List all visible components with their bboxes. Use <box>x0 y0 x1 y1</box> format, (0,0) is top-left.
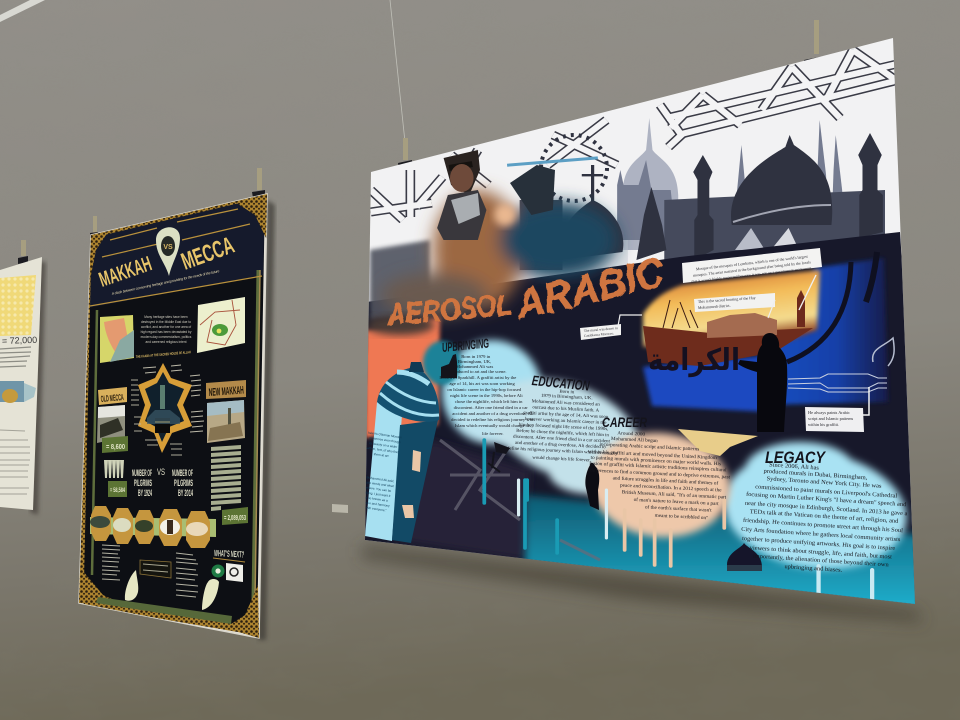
section: education: however working an Islamic career in the <box>525 417 607 426</box>
section: upbringing: chose the nightlife, which left him in <box>455 399 523 405</box>
section: career: meant to be scribbled on" <box>655 513 708 521</box>
section: legacy: City Arts foundation where he gathers local community artists <box>741 526 901 543</box>
section: upbringing: introduced to art and the scene. <box>449 369 507 374</box>
calligraphy: الكرامة <box>648 343 740 378</box>
subtitle: A clash between conserving heritage and providing for the needs of the future <box>110 269 220 296</box>
teal bottom wash <box>525 495 925 615</box>
dark brush strokes <box>787 252 877 362</box>
spray cloud: career <box>585 426 735 544</box>
section: career: CAREER <box>602 415 648 431</box>
panel: Makkah vs Mecca poster: PILGRIMS <box>174 478 193 488</box>
section: legacy <box>741 448 908 574</box>
section: career: peace and reconciliation. In a 2012 speech at the <box>620 483 722 493</box>
left bullet list <box>102 545 120 580</box>
panel: Makkah vs Mecca poster: NUMBER OF <box>172 468 193 478</box>
center quote box <box>140 560 171 578</box>
section: career: Mohammed Ali began <box>611 436 658 444</box>
section: upbringing: Islam which eventually would change his <box>455 423 531 428</box>
stat: pilgrims 2014 <box>222 507 248 525</box>
spray can captions: its beauty on a wider <box>369 441 397 449</box>
callout: script note <box>805 387 869 432</box>
section: legacy: friendship. He continues to promote street art through his Soul <box>743 517 903 534</box>
callout: sacred housing note: Mohammedi district. <box>698 304 731 310</box>
intro text lines <box>0 347 31 367</box>
section: legacy: TEDx talk at the Vatican on the theme of art, religion, and <box>749 508 899 525</box>
spray can captions: unifying. I just want it <box>362 490 391 498</box>
stat: pilgrims 1924: = 58,584 <box>110 487 125 494</box>
section: career: within his graffiti art and moved beyond the United Kingdom <box>588 448 717 461</box>
label: New Makkah <box>206 380 246 399</box>
islamic lattice pattern <box>371 50 931 220</box>
stat: 72,000: = 72,000 <box>2 335 37 346</box>
section: legacy: viewers to think about struggle, life, and faith, but most <box>749 545 892 561</box>
section: education: hip-hop focused night life scene of the 1990s, <box>519 423 609 432</box>
spray can captions: with everyone." <box>365 506 387 512</box>
paint drips <box>484 440 872 600</box>
section: career: and future struggles in life and faith and themes of <box>612 475 719 487</box>
section: upbringing: UPBRINGING <box>441 336 490 355</box>
section: legacy: LEGACY <box>765 448 827 467</box>
callout: mosque note <box>682 248 822 310</box>
spray cloud: education <box>496 373 643 500</box>
callout: mural location note: Casablanca Morocco. <box>584 331 614 338</box>
painting: kasbah <box>643 290 813 366</box>
callout: sacred housing note <box>694 293 775 318</box>
stat: old mecca area: = 8,600 <box>106 444 125 451</box>
silhouette figure <box>738 333 787 432</box>
intro text: Many heritage sites have been <box>144 315 188 319</box>
callout: mural location note: The mural was drawn in <box>584 326 618 333</box>
flourish ornament <box>873 338 894 366</box>
header band <box>87 196 265 308</box>
callout: mosque note: mosques. The artist narrated in the background after being told by the locals <box>693 260 811 278</box>
stat: old mecca area <box>102 436 128 453</box>
spray can captions: preserves even though <box>369 436 401 444</box>
icon: graduation cap <box>488 442 510 472</box>
section: upbringing: discontent. After one friend died in a car <box>454 405 528 410</box>
section: upbringing: Raised in Sparkhill. A graffiti artist by the <box>439 375 516 380</box>
section: career: of the earth's surface that wasn't <box>645 504 712 514</box>
central Kaaba star <box>138 363 192 453</box>
spray can <box>362 362 439 543</box>
section: upbringing: night life scene in the 1990s, before Ali <box>450 393 523 399</box>
section: legacy: upbringing and biases. <box>784 563 843 574</box>
comparison labels: BY 1924 <box>138 488 152 498</box>
spray can captions: them at art <box>374 452 389 458</box>
stat: pilgrims 1924 <box>108 481 127 497</box>
dark purple wash lower left <box>412 442 530 558</box>
hanging wires and clips <box>18 0 824 264</box>
section: education: graffiti artist by the age of 14, Ali was soon <box>523 411 609 420</box>
title: Aerosol Arabic: ARABIC <box>511 248 669 328</box>
label: Old Mecca <box>98 387 127 405</box>
section: education: redefine his religious journey with Islam which eventually <box>503 446 618 457</box>
intro text <box>141 315 192 344</box>
section: career: incorporating Arabic script and Islamic patterns <box>599 442 699 452</box>
section: upbringing: Born in 1979 in <box>461 354 491 359</box>
lower dark body <box>355 232 925 620</box>
section: upbringing: Birmingham, UK, <box>458 359 491 365</box>
intro text: and careened religious intent <box>146 340 187 344</box>
section: career: to painting murals with prominence on major world walls. His <box>590 455 721 467</box>
section: career: fusion of graffiti with Islamic artistic traditions reinspires cultural <box>589 460 727 473</box>
shadow of Aerosol Arabic poster <box>362 545 925 622</box>
callout: mural location note <box>580 315 642 340</box>
painting: harbour masts <box>663 300 698 328</box>
callout: mosque note: Mosque of the mosques of Lembarra, which is one of the world's largest <box>696 255 809 272</box>
section: upbringing: decided to redefine his religious journey with <box>451 417 535 422</box>
icon: Birmingham building <box>441 354 457 378</box>
stat: pilgrims 2014: = 2,089,053 <box>224 515 246 522</box>
section: education: would change his life forever. <box>532 456 591 463</box>
section: legacy: together to produce unifying artworks. His goal is to inspire <box>742 535 896 552</box>
icon: Starbucks logo <box>212 564 224 578</box>
icon: white logo box <box>226 563 243 582</box>
skyline: pale back layer <box>515 118 678 280</box>
spray can captions <box>366 432 402 512</box>
callout: script note: He always paints Arabic <box>808 410 850 415</box>
small wall label <box>332 504 348 513</box>
panel: Makkah vs Mecca poster <box>78 194 275 640</box>
section: legacy: produced murals in Dubai, Birmingham, <box>763 468 868 481</box>
callout: mosque note: that it wasn't highly respected because it was not on a government monument. <box>691 266 812 284</box>
section: legacy: Sydney, Toronto and New York City. He was <box>766 475 882 490</box>
hexagon timeline <box>90 506 216 548</box>
makkah area map <box>197 297 245 353</box>
panel: Makkah vs Mecca poster: NEW MAKKAH <box>208 385 244 399</box>
callout: sacred housing note: This is the sacred housing of the Hay <box>698 296 756 304</box>
gold borders <box>92 195 266 236</box>
intro text: high regard has been devastated by <box>141 330 192 334</box>
comparison labels: NUMBER OF <box>132 468 152 478</box>
icon: painter figure <box>585 463 599 510</box>
gold corner ornaments <box>90 234 106 275</box>
painting: sunset <box>643 270 820 347</box>
title: Makkah: MAKKAH <box>96 252 155 292</box>
green lower band <box>96 597 232 624</box>
section: career <box>588 415 731 521</box>
graffiti spray smudges behind title <box>381 190 617 317</box>
spray cloud: legacy <box>716 440 914 580</box>
header rules <box>90 209 262 306</box>
section: education: 1979 in Birmingham, UK. <box>541 394 593 401</box>
intro text: destroyed in the Middle East due to <box>141 320 191 324</box>
panel: Aerosol Arabic poster <box>355 38 931 620</box>
section: upbringing: life forever. <box>482 431 504 436</box>
section: career: of man's nature to leave a mark on a part <box>633 496 719 507</box>
geometric pattern lower left <box>440 440 600 560</box>
section: career: British Museum, Ali said, "It's of an ummatic part <box>622 489 727 501</box>
vs badge <box>156 227 180 276</box>
section: education: EDUCATION <box>531 373 591 395</box>
new makkah photo <box>207 400 245 443</box>
spray cloud: upbringing <box>442 340 542 444</box>
parchment tip <box>678 429 758 456</box>
comparison labels: VS <box>157 467 165 477</box>
intro text: modern-day commercialism, politics <box>141 335 192 339</box>
heading: Kaaba: THE KAABA AT THE SACRED HOUSE OF ALLAH <box>136 350 191 359</box>
shrine image <box>0 381 36 403</box>
right bullet list <box>176 553 198 597</box>
panel: Makkah vs Mecca poster: BY 2014 <box>178 488 193 498</box>
spray can captions: As Mohammed Ali said, <box>362 475 395 483</box>
panel: Makkah vs Mecca poster: OLD MECCA <box>100 392 124 404</box>
body text lines <box>0 430 30 494</box>
star side notes <box>131 365 204 455</box>
section: legacy: focusing on Martin Luther King's "I have a dream" speech and <box>746 491 907 508</box>
panel: far left poster <box>0 257 46 515</box>
title: Aerosol Arabic <box>385 248 669 332</box>
section: education: Before he chose the nightlife, which left him in <box>516 429 610 438</box>
section: education: outcast due to his Muslim faith. A <box>532 405 600 414</box>
section: education: and another of a drug overdose, Ali decided to <box>515 441 607 450</box>
spray can captions: saffron, text, of who find <box>366 446 399 454</box>
skyline: mid layer <box>617 120 842 240</box>
section: legacy: Since 2006, Ali has <box>769 462 820 472</box>
section: education: Mohammed Ali was considered an <box>532 399 601 408</box>
callout: script note: script and Islamic patterns <box>808 416 854 421</box>
spray can captions: Islam's Ottoman Mosque <box>368 431 403 439</box>
section: legacy: commissioned to paint murals on Liverpool's Cathedral <box>755 484 898 500</box>
spray can captions: I believe. You can be <box>363 485 392 493</box>
section: upbringing: accident and another of a drug overdose, Ali <box>452 411 534 417</box>
section: upbringing: Mohammed Ali was <box>456 364 494 369</box>
spray can captions: "I take words and what <box>362 480 394 488</box>
title: Aerosol Arabic: AEROSOL <box>385 288 513 332</box>
icon: white hands <box>125 570 219 610</box>
section: upbringing: on Islamic career in the hip-hop focused <box>447 387 522 392</box>
spray can captions: peace and harmony <box>362 500 390 508</box>
section: upbringing <box>439 336 535 436</box>
ferris wheel <box>541 135 607 201</box>
section: career: differences to find a common ground and to deprive extremes, past <box>590 467 731 480</box>
painting: blue field <box>643 258 888 412</box>
skyline: dark silhouettes <box>520 133 885 270</box>
spray can captions: to be known as a <box>364 495 388 503</box>
panel: Makkah vs Mecca poster: WHAT'S NEXT? <box>214 548 244 560</box>
section: upbringing: age of 14, his art was soon working <box>450 381 516 387</box>
section: career: Around 2000 <box>617 430 646 438</box>
title: Mecca: MECCA <box>178 232 238 276</box>
circuit lines motif <box>788 374 887 392</box>
comparison labels <box>132 467 193 498</box>
section: education: Born in <box>559 390 575 395</box>
callout: script note: within his graffiti. <box>808 422 839 427</box>
icon: mosque dome <box>727 543 762 571</box>
comparison labels: PILGRIMS <box>134 478 152 488</box>
section: education <box>503 373 618 463</box>
graffiti artist portrait <box>437 150 598 240</box>
honeycomb yellow block <box>0 275 36 336</box>
section: legacy: near the city mosque in Edinburgh, Scotland. In 2013 he gave a <box>745 500 908 517</box>
vs badge: VS <box>163 244 173 251</box>
intro text: conflict, and another for one area of <box>141 325 191 329</box>
pilgrim bars <box>211 445 241 511</box>
old mecca photo <box>97 405 125 443</box>
section: education: discontent. After one friend died in a car accident <box>513 435 611 444</box>
saudi map <box>100 315 134 363</box>
section: legacy: importantly, the alienation of those beyond their own <box>753 553 889 568</box>
orange block left <box>365 318 440 438</box>
icon: pilgrim figures <box>104 460 124 478</box>
